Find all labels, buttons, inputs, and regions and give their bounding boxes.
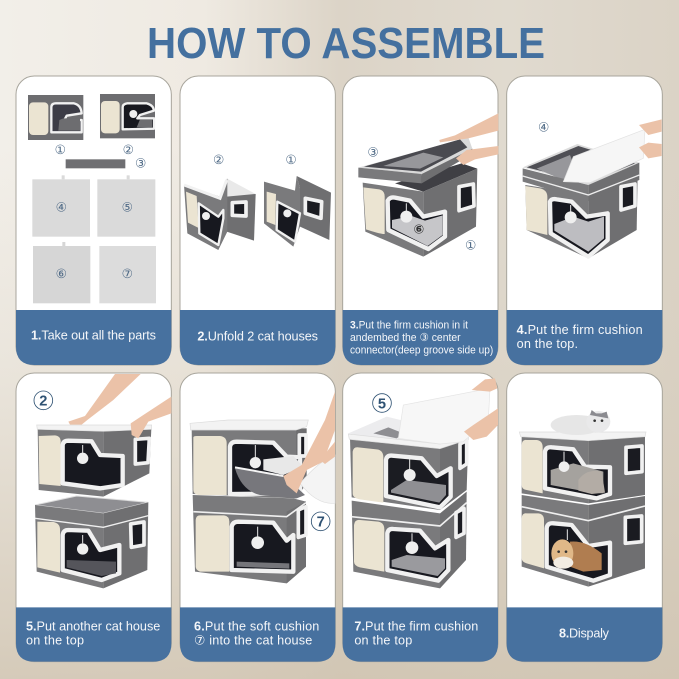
panel: step 4: [507, 76, 662, 365]
hands: [639, 119, 662, 158]
part 7: cushion: ⑦: [122, 266, 133, 281]
arm and soft cushion: [283, 392, 335, 503]
caption: 1.Take out all the parts: [31, 328, 156, 342]
caption: on the top: [26, 634, 84, 648]
caption: 5.Put another cat house: [26, 620, 160, 634]
cushion: [563, 129, 645, 183]
label 2: 2: [39, 394, 47, 410]
part 4: cushion: ④: [56, 199, 67, 214]
top house: [519, 432, 646, 503]
caption: 2.Unfold 2 cat houses: [197, 330, 318, 344]
bottom house: [352, 492, 467, 588]
unfolded house 1: [264, 176, 331, 247]
label 5: 5: [378, 396, 386, 412]
label 5: [373, 394, 391, 412]
caption: 6.Put the soft cushion: [194, 620, 319, 634]
caption: on the top.: [517, 337, 578, 351]
label 6: ⑥: [414, 221, 424, 236]
label 2: ②: [123, 142, 134, 157]
label 2: ②: [213, 152, 224, 167]
part 5: cushion: [97, 175, 155, 237]
label 1: ①: [465, 237, 476, 252]
caption: 7.Put the firm cushion: [354, 620, 478, 634]
caption: andembed the ③ center: [350, 332, 461, 344]
panel: step 7: [343, 373, 498, 662]
bottom house: [193, 495, 306, 583]
house body: [363, 163, 477, 257]
label 7: 7: [317, 515, 325, 531]
caption: 3.Put the firm cushion in it: [350, 319, 476, 331]
hands: [68, 374, 171, 438]
part 6: cushion: [33, 242, 90, 303]
part 4: cushion: [32, 175, 90, 237]
label 4: ④: [538, 119, 549, 134]
title: HOW TO ASSEMBLE: [147, 19, 545, 68]
label 1: ①: [55, 142, 66, 157]
cushion: [398, 388, 490, 444]
house: [523, 144, 639, 258]
part 3: connector: [66, 159, 125, 168]
label 1: ①: [285, 152, 297, 167]
caption: connector(deep groove side up): [350, 345, 493, 357]
part 1: [28, 95, 83, 140]
part 2: [100, 94, 155, 138]
bottom house: [522, 495, 645, 587]
bottom house: [35, 496, 148, 588]
unfolded house 2: [184, 178, 256, 250]
part 5: cushion: ⑤: [122, 199, 133, 214]
caption: 4.Put the firm cushion: [517, 323, 643, 337]
caption: on the top: [354, 634, 412, 648]
top house: [348, 417, 468, 510]
cushion being inserted: [235, 456, 305, 498]
label 3: ③: [367, 144, 379, 159]
lid: [358, 137, 473, 183]
panel: step 3: [343, 76, 498, 365]
top house: [37, 425, 152, 497]
panel: step 6: [180, 373, 335, 662]
hands: [439, 113, 498, 165]
caption: ⑦ into the cat house: [194, 634, 312, 648]
panel: step 1: [16, 76, 171, 365]
label 3: ③: [135, 155, 146, 170]
part 7: cushion: [99, 246, 156, 303]
part 6: cushion: ⑥: [56, 266, 67, 281]
panel: step 2: [180, 76, 335, 365]
label 7: [311, 512, 330, 531]
panel: step 8: [507, 373, 662, 662]
caption: 8.Dispaly: [559, 626, 610, 640]
label 2: [34, 391, 53, 410]
top house: [190, 420, 308, 498]
hands: [464, 378, 498, 440]
white cat: [551, 410, 610, 435]
panel: step 5: [16, 373, 171, 662]
